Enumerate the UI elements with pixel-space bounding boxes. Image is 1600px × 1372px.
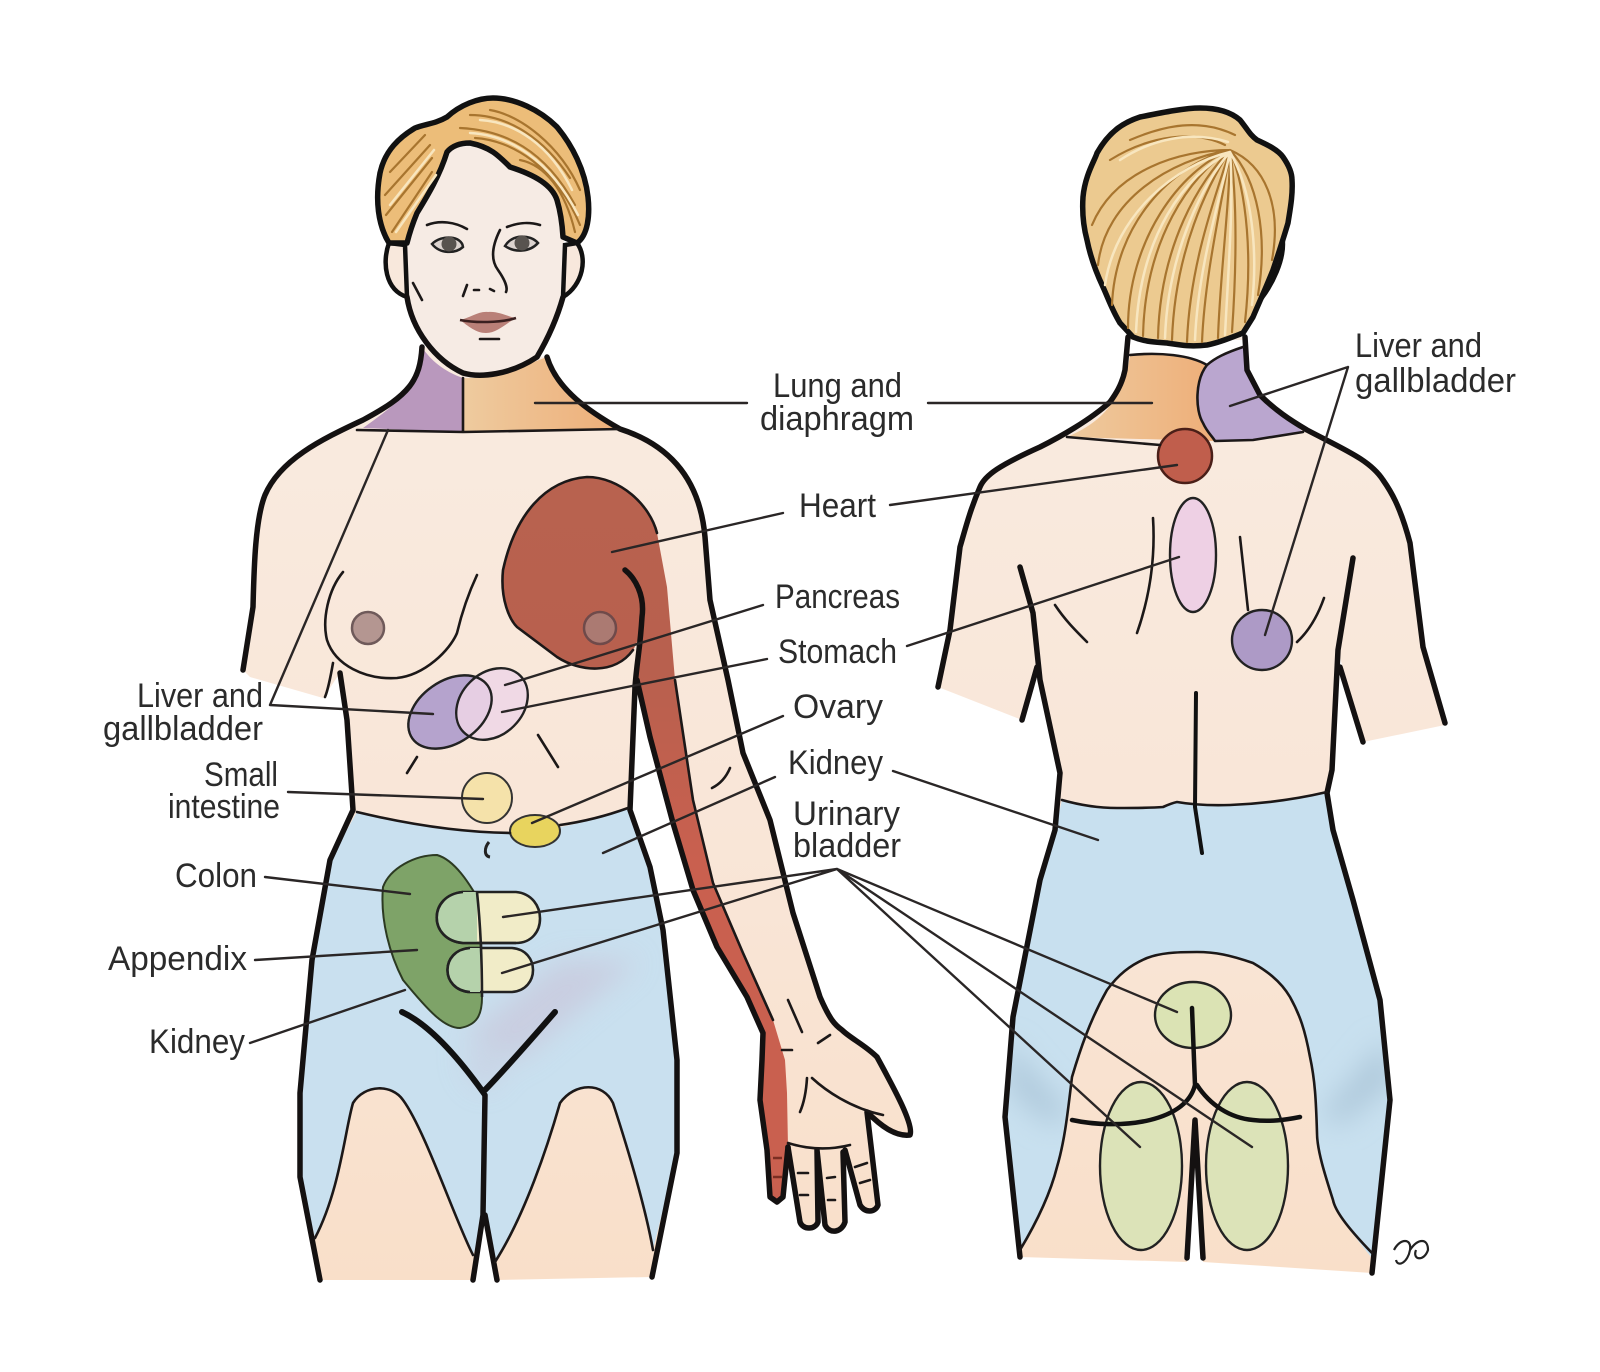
- label: heart: Heart: [799, 487, 877, 525]
- referred area: heart: [502, 477, 657, 669]
- purple circle, back: [1232, 610, 1292, 670]
- label: pancreas: Pancreas: [775, 578, 900, 616]
- back hair strands: [1092, 125, 1275, 342]
- label: liver and gallbladder left: [103, 677, 263, 748]
- buttocks shadows on blue: [1010, 1050, 1386, 1122]
- liver and gallbladder oval, front: [395, 660, 505, 764]
- label: small intestine: [168, 756, 280, 826]
- label: ovary: Ovary: [793, 688, 883, 726]
- label: liver and gallbladder left: gallbladder: [103, 710, 263, 748]
- mouth line: [460, 318, 516, 322]
- back contour details: [1020, 347, 1372, 1253]
- back body outline: [938, 337, 1445, 1273]
- green oval, lower back: [1155, 982, 1231, 1048]
- artist signature: [1394, 1241, 1428, 1264]
- colon and appendix zone: [382, 855, 482, 1028]
- spine line: [1195, 693, 1202, 853]
- lips: [460, 312, 516, 333]
- label: liver and gallbladder right: [1355, 327, 1516, 400]
- label: liver and gallbladder right: gallbladder: [1355, 362, 1516, 400]
- label: kidney left: Kidney: [149, 1023, 245, 1061]
- back hair highlights: [1105, 137, 1254, 340]
- under lip: [480, 338, 499, 340]
- left ear: [386, 243, 407, 297]
- front body skin: [243, 347, 911, 1280]
- label: small intestine: intestine: [168, 788, 280, 826]
- label: urinary bladder: [793, 795, 901, 865]
- labels: [103, 327, 1516, 1061]
- brows and nose: [413, 222, 540, 300]
- stomach overlap outline: [395, 660, 505, 764]
- liver zone on neck and shoulder, front: [363, 347, 463, 432]
- lung and diaphragm zone, back: [1067, 354, 1215, 441]
- white collar: [1130, 340, 1243, 365]
- jaw: [407, 297, 563, 375]
- navel: [485, 842, 490, 857]
- small intestine circle: [462, 773, 512, 823]
- abdominal shading: [460, 960, 640, 1090]
- pancreas oval: [442, 654, 542, 754]
- green thigh oval left: [1100, 1082, 1182, 1250]
- ovary oval: [510, 815, 560, 847]
- label: lung and diaphragm: Lung and: [773, 367, 902, 405]
- front figure: [243, 98, 911, 1280]
- hair tuft behind right side: [1262, 240, 1283, 298]
- liver zone on neck, back: [1197, 347, 1303, 441]
- heart circle, back: [1158, 429, 1212, 483]
- inner thigh arches: [315, 1087, 653, 1262]
- label: small intestine: Small: [204, 756, 278, 794]
- pinky finger creases: [773, 1158, 782, 1177]
- lung and diaphragm zone, front: [463, 357, 620, 432]
- label: lung and diaphragm: [760, 367, 914, 438]
- pink oval, back: [1170, 498, 1216, 612]
- referred area: arm band: [625, 520, 788, 1202]
- label: liver and gallbladder right: Liver and: [1355, 327, 1482, 365]
- groin line: [402, 1012, 555, 1092]
- front body outline: [243, 347, 911, 1280]
- back body skin: [938, 337, 1445, 1273]
- label: appendix: Appendix: [108, 940, 247, 978]
- green thigh oval right: [1206, 1082, 1288, 1250]
- front head: [378, 98, 589, 376]
- nipple right: [584, 612, 616, 644]
- face: [407, 146, 565, 376]
- label: stomach: Stomach: [778, 633, 897, 671]
- label: urinary bladder: Urinary: [793, 795, 900, 833]
- hair: [378, 98, 589, 243]
- eyes: [432, 236, 538, 252]
- buttocks crease: [1072, 1008, 1300, 1124]
- front body contour details: [325, 378, 883, 1200]
- label: urinary bladder: bladder: [793, 827, 901, 865]
- back blue region with buttocks arch: [1005, 792, 1390, 1258]
- leader lines: [250, 367, 1348, 1147]
- hair highlights: [390, 120, 578, 232]
- label: colon: Colon: [175, 857, 257, 895]
- label: lung and diaphragm: diaphragm: [760, 400, 914, 438]
- back hair: [1083, 108, 1292, 346]
- heart outline: [502, 477, 657, 669]
- right ear: [563, 243, 583, 297]
- label: kidney right: Kidney: [788, 744, 883, 782]
- arm band contour and pinky: [625, 570, 788, 1202]
- label: liver and gallbladder left: Liver and: [137, 677, 263, 715]
- nipple left: [352, 612, 384, 644]
- lower body blue region: [300, 808, 677, 1262]
- back figure: [938, 108, 1445, 1273]
- hair strands: [385, 110, 580, 232]
- kidney zones, front: [437, 892, 540, 997]
